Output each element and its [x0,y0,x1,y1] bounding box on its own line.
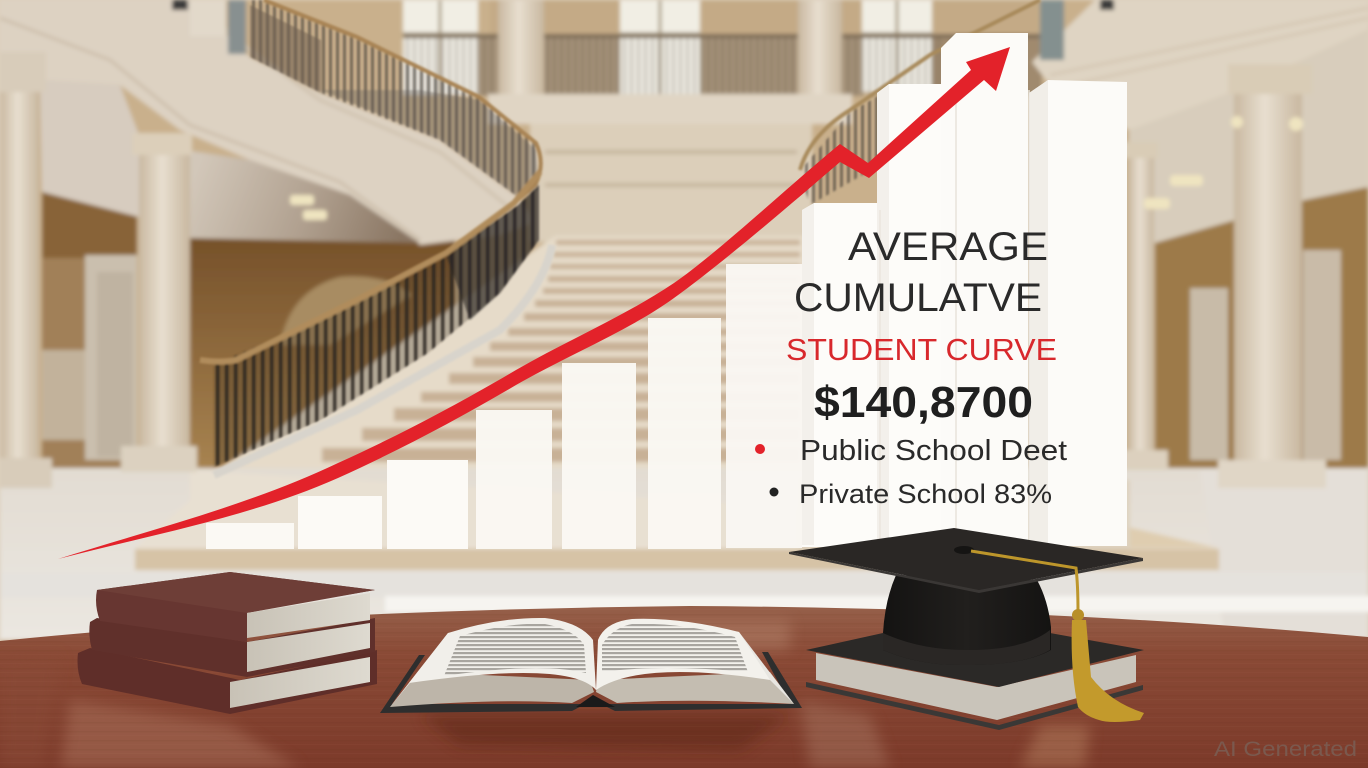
rising red arrow [58,47,1010,559]
big figure: $140,8700 [814,378,1033,427]
heading: AVERAGE [848,225,1048,269]
icon: graduation cap on books [789,528,1144,730]
subheading: STUDENT CURVE [786,332,1057,367]
icon: open book [380,618,802,713]
bar chart [206,33,1127,549]
legend: private school: Private School 83% [799,479,1052,509]
icon: stack of closed books [78,572,377,714]
heading [794,225,1048,320]
legend: public school: Public School Deet [800,435,1067,467]
watermark: AI Generated [1214,738,1357,761]
heading: CUMULATVE [794,276,1042,320]
table top [0,606,1368,768]
